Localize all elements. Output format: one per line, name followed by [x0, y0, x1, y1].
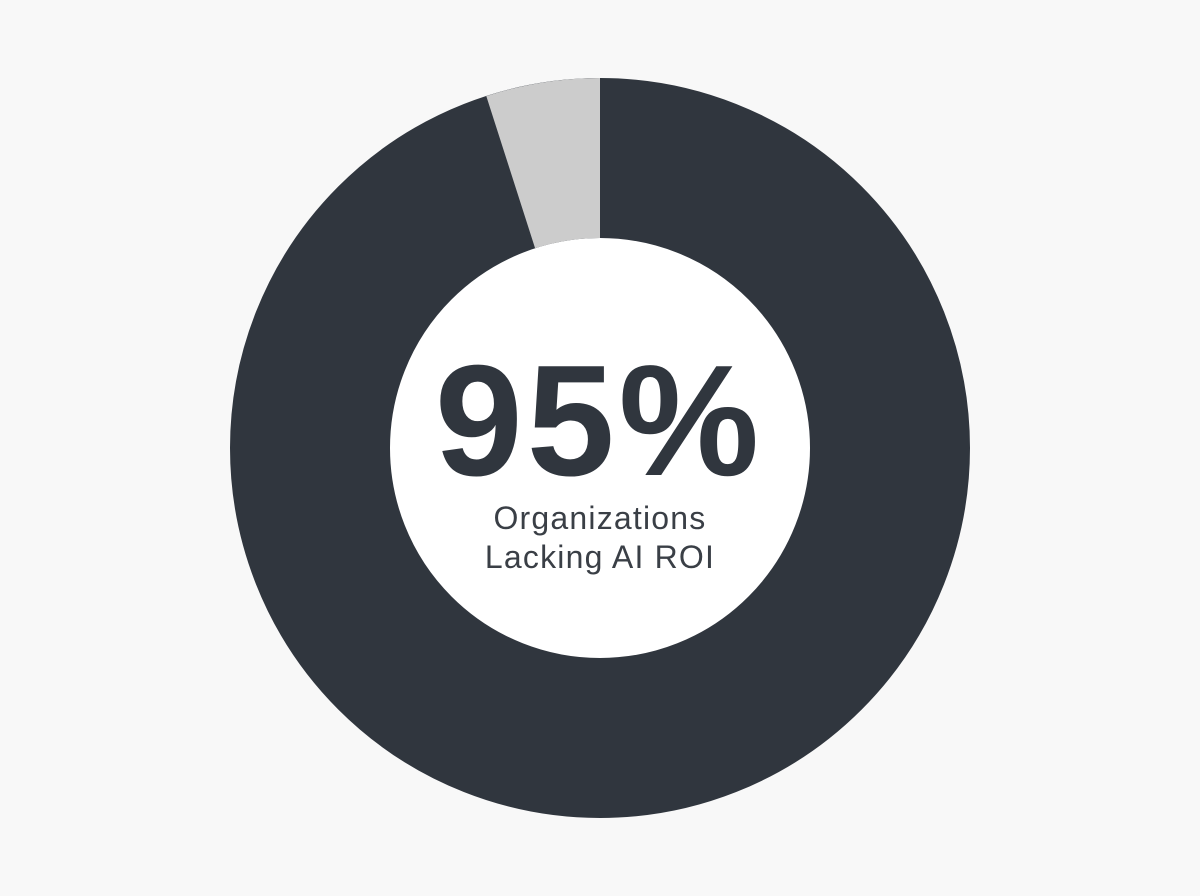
- center label: [435, 333, 763, 575]
- segment: 5% light gray: [486, 78, 600, 248]
- center hole: [390, 238, 810, 658]
- segment: 95% dark: [310, 158, 890, 738]
- big number: 95%: [435, 333, 763, 509]
- caption: Organizations: [493, 500, 707, 536]
- center label: Lacking AI ROI: [485, 539, 715, 575]
- chart: donut ring: [310, 78, 890, 738]
